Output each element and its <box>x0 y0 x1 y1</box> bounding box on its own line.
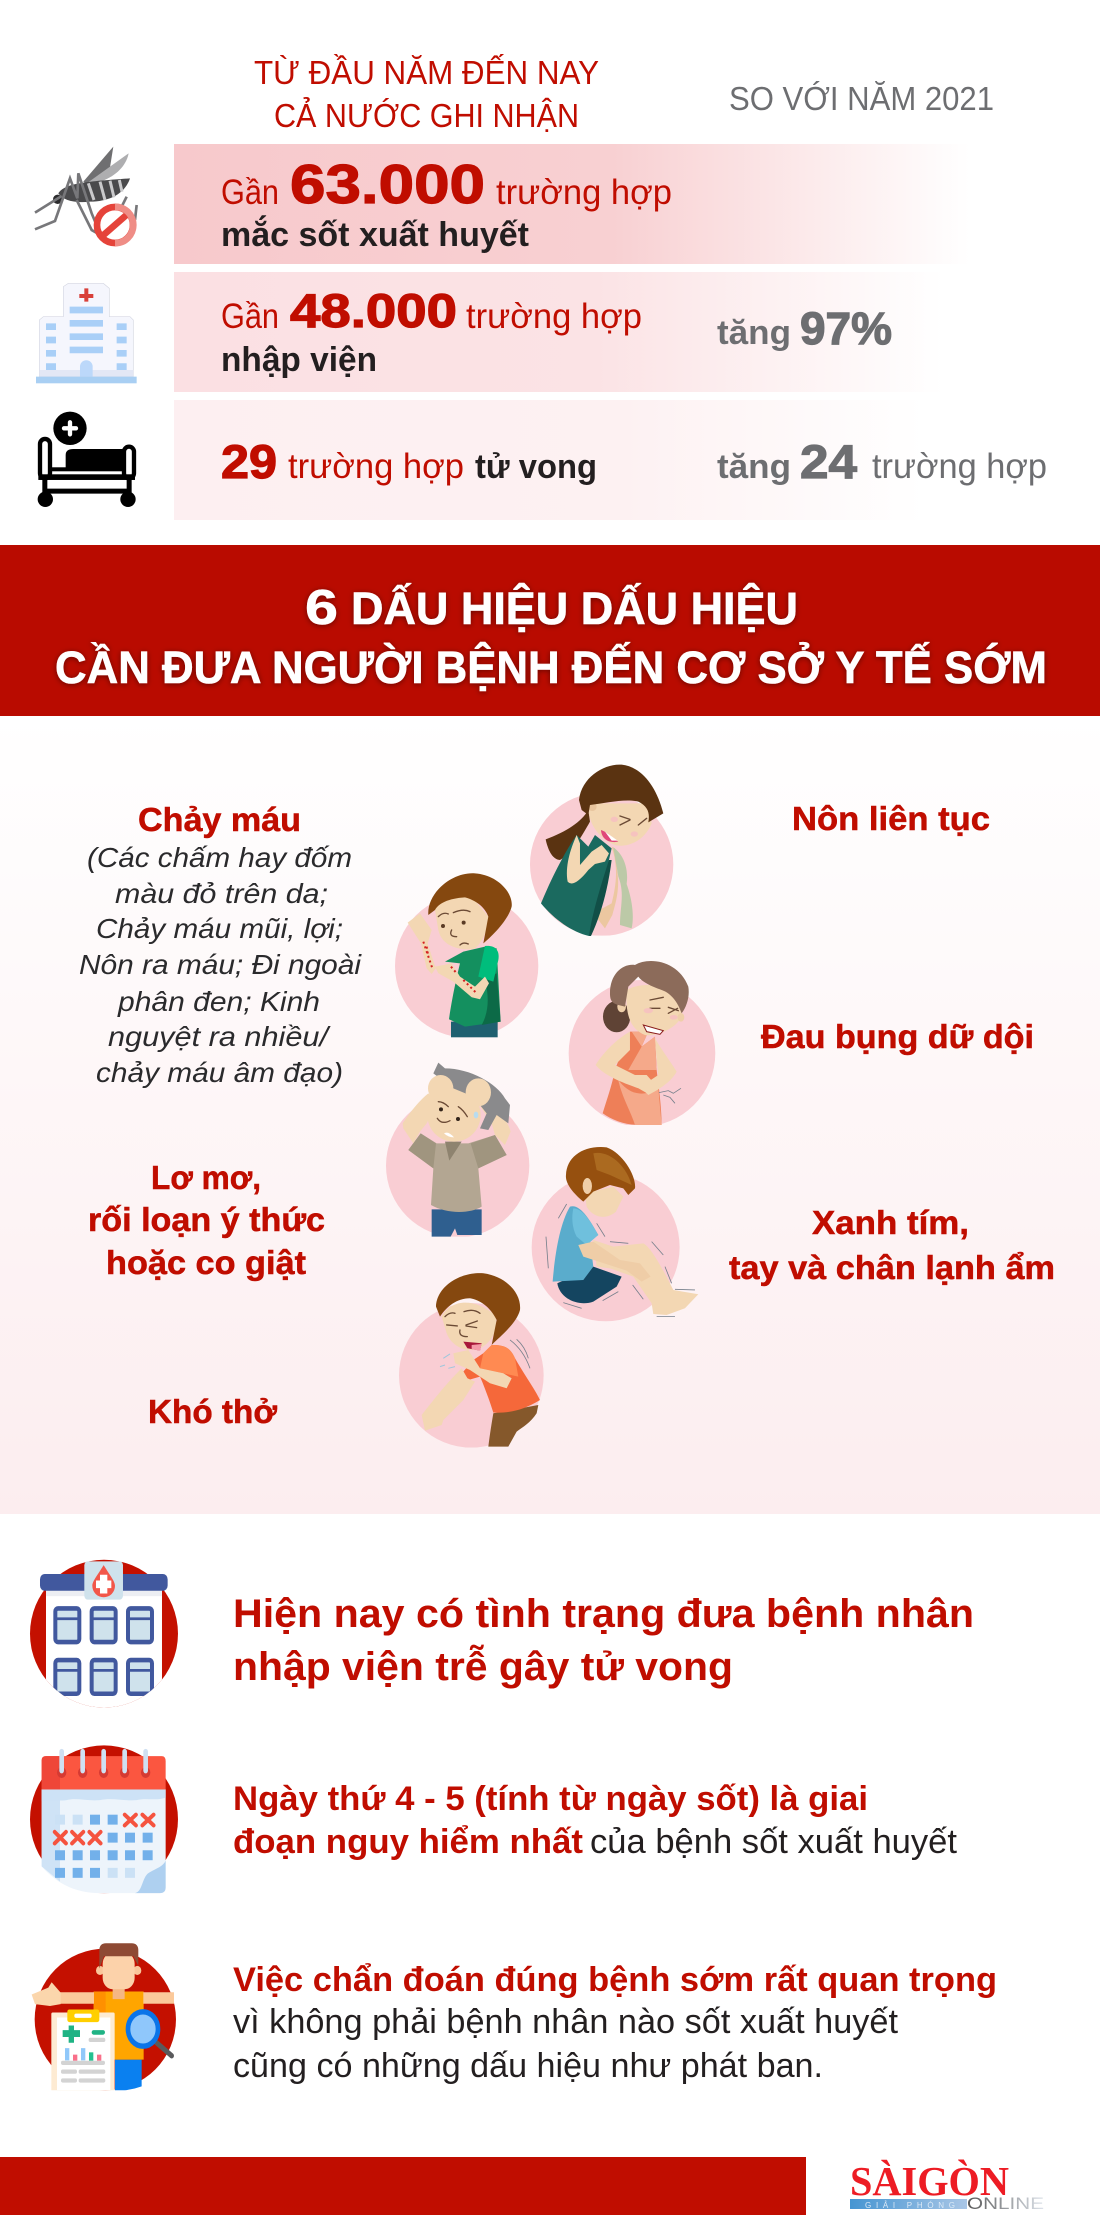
heading banner: 6 warning signs: 6 <box>305 581 338 635</box>
text: bleeding: chảy máu âm đạo) <box>96 1057 343 1088</box>
text: severe abdominal pain: Đau bụng dữ dội <box>761 1018 1034 1055</box>
header: from start of year nationwide: TỪ ĐẦU NĂM ĐẾN NAY <box>254 54 599 91</box>
panel: hospitalised row: trường hợp <box>466 297 642 336</box>
panel: hospitalised row: 48.000 <box>290 284 457 337</box>
icon: mosquito with prohibition sign <box>35 147 137 247</box>
text: late hospitalisation note: Hiện nay có tình trạng đưa bệnh nhân <box>233 1592 974 1636</box>
header: from start of year nationwide: CẢ NƯỚC GHI NHẬN <box>274 97 579 134</box>
panel: deaths row: 24 <box>800 435 857 488</box>
heading banner: 6 warning signs: DẤU HIỆU DẤU HIỆU <box>351 583 798 634</box>
text: early diagnosis note: vì không phải bệnh nhân nào sốt xuất huyết <box>233 2003 899 2041</box>
text: early diagnosis note: Việc chẩn đoán đúng bệnh sớm rất quan trọng <box>233 1961 997 1999</box>
text: dangerous days note: của bệnh sốt xuất huyết <box>590 1823 958 1861</box>
panel: deaths row: trường hợp <box>872 447 1047 486</box>
panel: hospitalised row: Gần <box>221 297 279 336</box>
text: drowsiness: rối loạn ý thức <box>88 1201 325 1238</box>
panel: deaths row: 29 <box>221 435 277 488</box>
text: bleeding: (Các chấm hay đốm <box>87 842 352 873</box>
text: bleeding: Chảy máu mũi, lợi; <box>96 913 343 944</box>
panel: deaths row: tử vong <box>475 448 597 486</box>
text: cyanosis <box>729 1204 1055 1286</box>
panel: cases row: mắc sốt xuất huyết <box>221 216 529 254</box>
footer bar <box>0 2157 806 2215</box>
text: bleeding: màu đỏ trên da; <box>115 878 328 909</box>
illustration: coughing boy <box>399 1273 544 1448</box>
panel: hospitalised row: 97% <box>800 303 892 354</box>
text: bleeding: phân đen; Kinh <box>117 986 320 1017</box>
logo: Sài Gòn Online: ONLINE <box>967 2194 1044 2213</box>
panel: cases row: 63.000 <box>290 153 485 215</box>
panel: warning signs background <box>0 716 1100 1514</box>
text: cyanosis: tay và chân lạnh ẩm <box>729 1249 1055 1286</box>
text: dangerous days note <box>233 1780 958 1861</box>
panel: deaths row: trường hợp <box>288 447 464 486</box>
icon: hospital in red circle <box>30 1560 178 1711</box>
text: cyanosis: Xanh tím, <box>812 1204 969 1241</box>
panel: cases row: Gần <box>221 173 279 212</box>
text: bleeding <box>79 801 362 1088</box>
header: compared with 2021: SO VỚI NĂM 2021 <box>729 80 994 117</box>
text: early diagnosis note: cũng có những dấu hiệu như phát ban. <box>233 2047 823 2085</box>
text: drowsiness <box>88 1159 325 1281</box>
panel: cases row <box>174 144 970 264</box>
text: shortness of breath: Khó thở <box>148 1393 278 1430</box>
text: late hospitalisation note: nhập viện trễ gây tử vong <box>233 1643 733 1689</box>
heading banner: 6 warning signs <box>0 545 1100 716</box>
text: late hospitalisation note <box>233 1592 974 1689</box>
panel: cases row: trường hợp <box>496 173 672 212</box>
illustration: woman with stomach pain <box>569 961 715 1127</box>
illustration: vomiting girl <box>530 765 673 936</box>
text: early diagnosis note <box>233 1961 997 2085</box>
text: continuous vomiting: Nôn liên tục <box>792 800 990 837</box>
panel: hospitalised row: tăng <box>717 314 791 352</box>
text: bleeding: Chảy máu <box>138 801 301 838</box>
text: dangerous days note: Ngày thứ 4 - 5 (tính từ ngày sốt) là giai <box>233 1780 868 1818</box>
panel: hospitalised row <box>174 272 944 392</box>
text: drowsiness: hoặc co giật <box>106 1244 306 1281</box>
logo: Sài Gòn Online: SÀIGÒN <box>850 2158 1009 2204</box>
illustration: man with headache <box>386 1063 529 1237</box>
text: drowsiness: Lơ mơ, <box>151 1159 261 1196</box>
logo: Sài Gòn Online <box>850 2158 1044 2213</box>
panel: hospitalised row: nhập viện <box>221 341 377 379</box>
text: bleeding: nguyệt ra nhiều/ <box>108 1021 332 1052</box>
logo: Sài Gòn Online: GIẢI PHÓNG <box>865 2201 955 2210</box>
icon: hospital bed with plus sign <box>38 412 136 507</box>
panel: deaths row: tăng <box>717 448 791 486</box>
text: bleeding: Nôn ra máu; Đi ngoài <box>79 949 362 980</box>
header: from start of year nationwide <box>254 54 599 134</box>
illustration: boy with rash <box>395 873 538 1038</box>
illustration: shivering boy with cold limbs <box>532 1147 698 1321</box>
text: dangerous days note: đoạn nguy hiểm nhất <box>233 1823 583 1861</box>
icon: hospital building <box>36 283 137 383</box>
icon: doctor with clipboard in red circle <box>32 1943 176 2093</box>
icon: calendar in red circle <box>30 1745 178 1893</box>
panel: deaths row <box>174 400 1047 520</box>
heading banner: 6 warning signs: CẦN ĐƯA NGƯỜI BỆNH ĐẾN CƠ SỞ Y TẾ SỚM <box>55 642 1047 693</box>
